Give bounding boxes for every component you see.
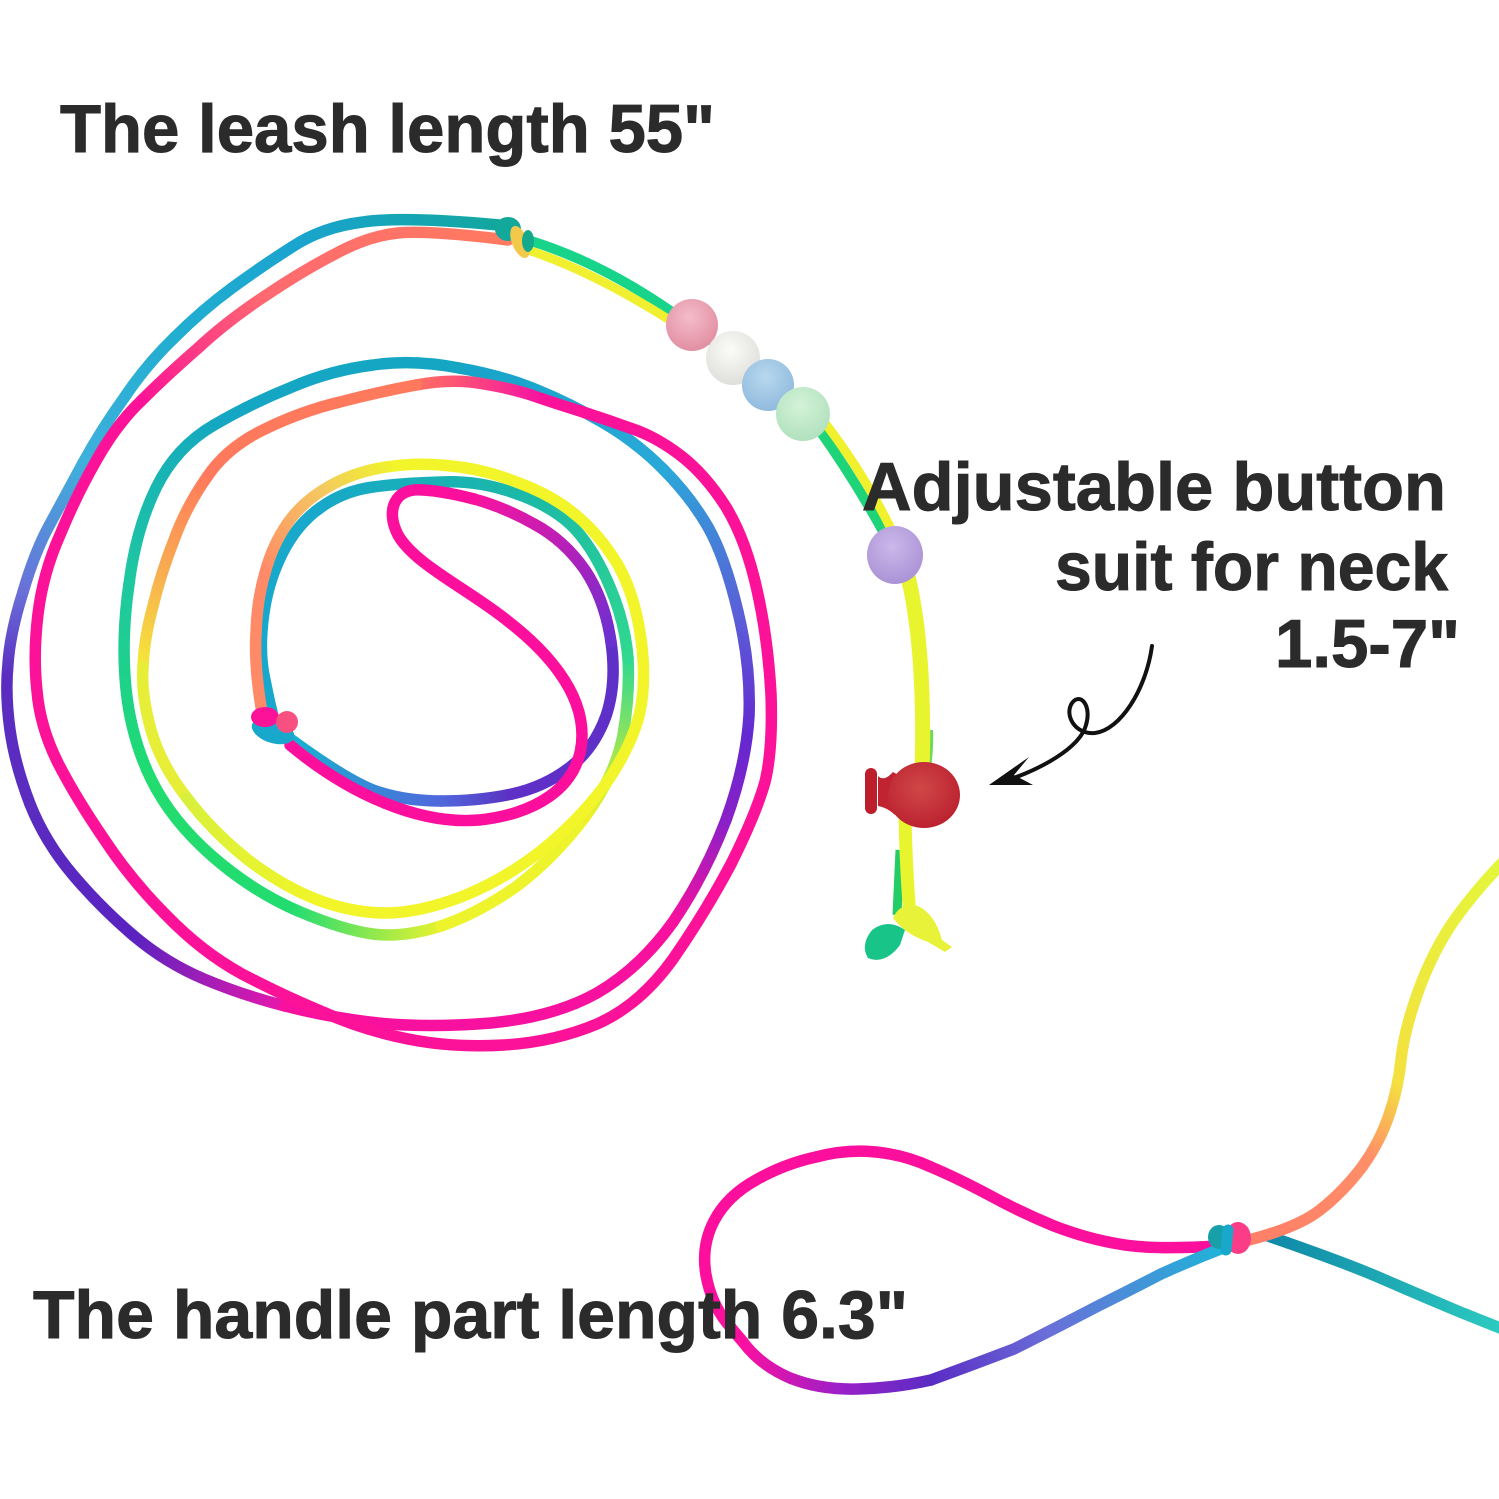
outer blue strand	[7, 220, 749, 1026]
handle cord to upper right	[1245, 860, 1499, 1241]
purple centre strand	[285, 499, 613, 801]
bead: green	[776, 387, 830, 441]
cord to beads	[525, 240, 718, 346]
arrow: points to red button	[989, 646, 1152, 785]
knot: centre coil knot	[248, 707, 298, 749]
cord end with knot	[865, 815, 952, 960]
magenta centre loop	[290, 490, 582, 821]
handle loop	[705, 1151, 1223, 1389]
callout: adjustable button: suit for neck	[1055, 529, 1448, 605]
knot: top leash knot	[495, 217, 534, 261]
callout: adjustable button: Adjustable button	[862, 449, 1446, 525]
bead: pink	[666, 299, 718, 351]
bead: purple	[867, 526, 923, 584]
callout: adjustable button: 1.5-7"	[1275, 606, 1460, 682]
bead: blue	[742, 359, 794, 411]
callout: adjustable button	[862, 449, 1460, 682]
cord between beads and button	[818, 423, 930, 775]
title: handle part length: The handle part length 6.3"	[33, 1277, 908, 1353]
rainbow leash coil	[7, 220, 771, 1046]
title: leash length: The leash length 55"	[60, 91, 715, 167]
beads on the leash	[666, 299, 830, 441]
handle cord to lower right	[1268, 1236, 1499, 1330]
bead: white	[706, 331, 760, 385]
knot: handle knot	[1208, 1222, 1251, 1254]
inner pink and yellow strand	[35, 232, 771, 1046]
adjustable red button	[865, 762, 960, 828]
